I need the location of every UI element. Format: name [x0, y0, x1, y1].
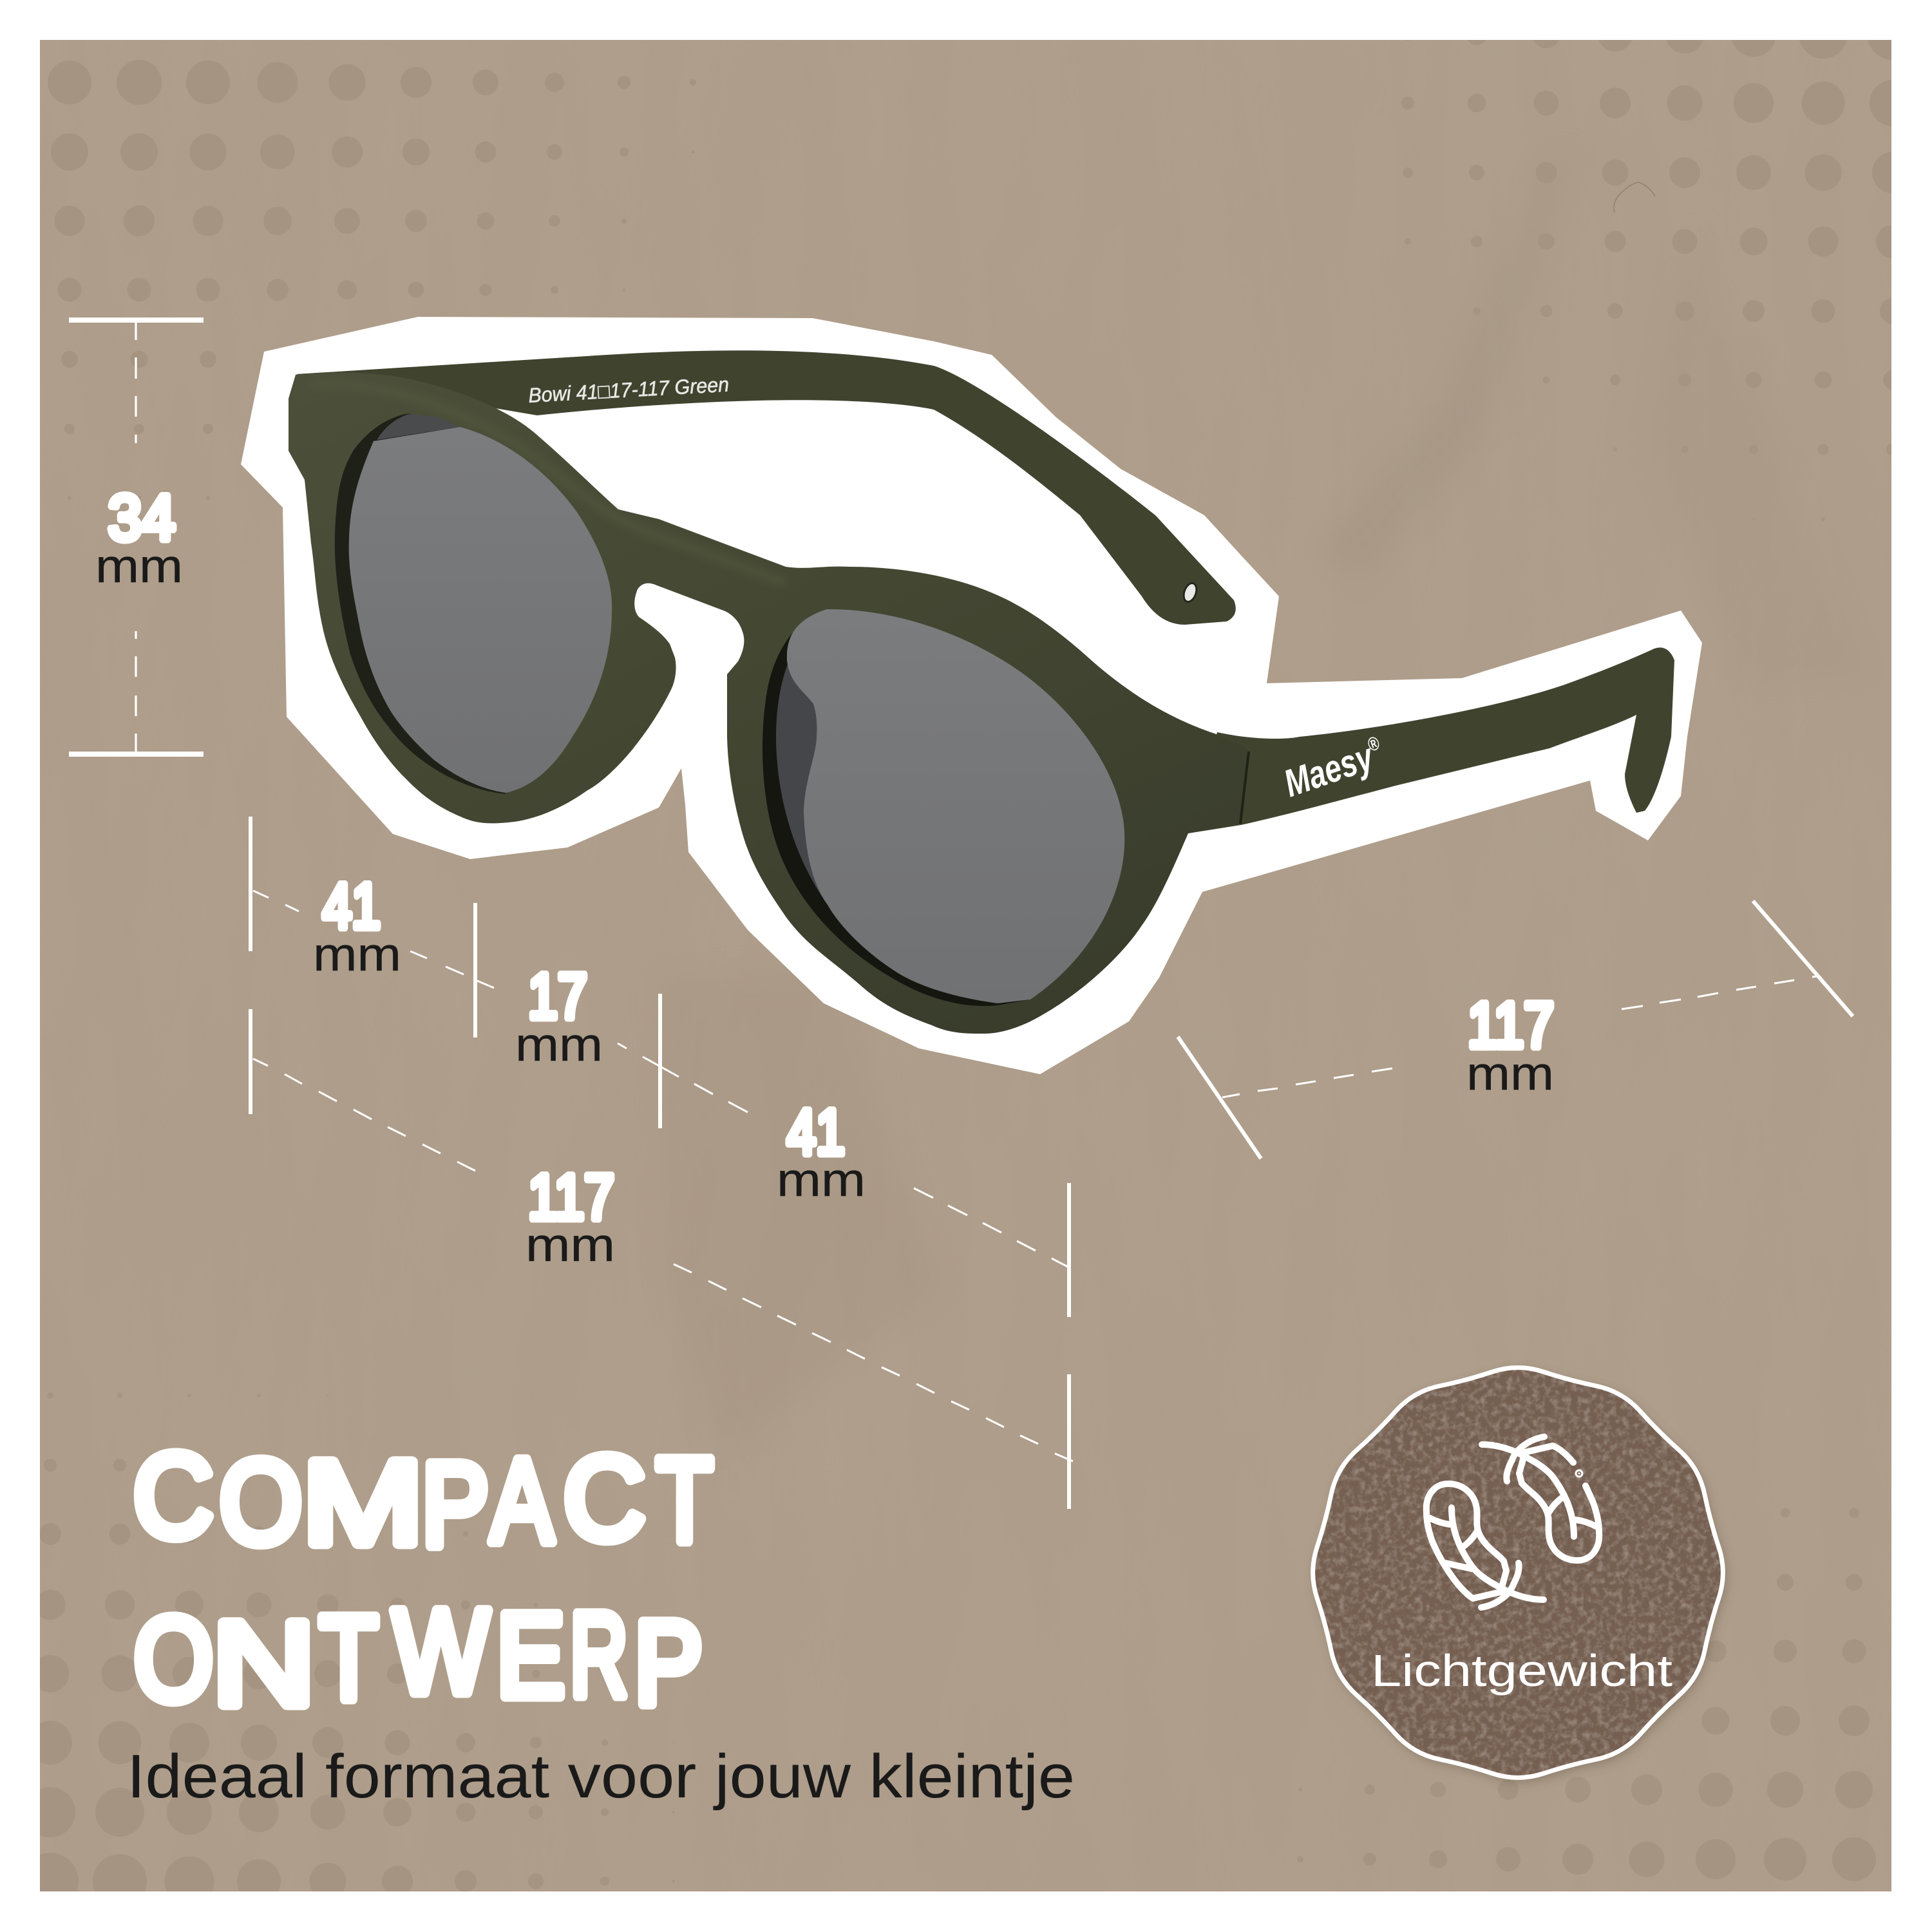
- brand logo: Maesy: [1278, 726, 1405, 805]
- temple engraving: Bowi 41□17-117 Green: [527, 373, 730, 407]
- dimension: lens width 41 mm: [251, 817, 494, 1037]
- dimension: total width 117 mm: [251, 1009, 1073, 1509]
- title: T: [656, 1434, 713, 1567]
- sunglasses product sticker: [241, 317, 1702, 1074]
- dimension: total width 117 mm: 117: [528, 1161, 614, 1233]
- back temple arm: [296, 350, 1236, 625]
- title: [133, 1430, 713, 1730]
- title: M: [303, 1437, 423, 1569]
- title: P: [422, 1439, 489, 1571]
- right temple arm: [1188, 647, 1674, 833]
- front frame: [289, 372, 1247, 1034]
- title: T: [319, 1592, 378, 1725]
- title: P: [634, 1597, 703, 1730]
- left lens: [349, 427, 612, 793]
- dimension: second lens width 41 mm: mm: [777, 1154, 866, 1206]
- dimension: bridge width 17 mm: mm: [515, 1019, 603, 1071]
- dimension: temple length 117 mm: [1178, 901, 1853, 1159]
- dimension: total width 117 mm: mm: [526, 1219, 615, 1271]
- right lens reflection: [776, 618, 837, 905]
- title: W: [393, 1586, 489, 1718]
- temple hole: [1181, 582, 1199, 603]
- right lens rim: [762, 609, 1030, 1006]
- title: C: [564, 1432, 645, 1565]
- title: O: [134, 1593, 213, 1726]
- frame highlight: [309, 384, 786, 583]
- title: A: [491, 1435, 553, 1567]
- brand logo: ®: [1365, 732, 1383, 756]
- dimension: temple length 117 mm: 117: [1468, 989, 1554, 1061]
- icon: feathers: [1426, 1437, 1599, 1607]
- subtitle: Ideaal formaat voor jouw kleintje: [127, 1742, 1075, 1811]
- right lens: [787, 609, 1124, 1003]
- badge: lichtgewicht: [1313, 1368, 1725, 1781]
- title: E: [497, 1589, 565, 1722]
- white sticker cut-out: [241, 317, 1702, 1074]
- dimension: lens width 41 mm: 41: [323, 870, 381, 942]
- left lens rim: [335, 413, 515, 794]
- title: O: [220, 1436, 302, 1569]
- dimension: lens height 34 mm: mm: [95, 540, 183, 592]
- dimension: bridge width 17 mm: [515, 960, 660, 1128]
- dimension: second lens width 41 mm: 41: [787, 1096, 845, 1168]
- dimension: bridge width 17 mm: 17: [528, 960, 587, 1032]
- dimension: lens height 34 mm: [69, 320, 204, 754]
- badge label: Lichtgewicht: [1371, 1645, 1672, 1696]
- left lens reflection: [377, 414, 460, 440]
- dimension: temple length 117 mm: mm: [1466, 1048, 1554, 1100]
- title: N: [213, 1598, 315, 1730]
- dimension: second lens width 41 mm: [618, 1043, 1069, 1317]
- hinge line: [1240, 752, 1249, 824]
- dimension: lens width 41 mm: mm: [313, 929, 401, 981]
- title: R: [570, 1589, 628, 1721]
- title: C: [133, 1430, 213, 1562]
- dimension: lens height 34 mm: 34: [108, 482, 175, 553]
